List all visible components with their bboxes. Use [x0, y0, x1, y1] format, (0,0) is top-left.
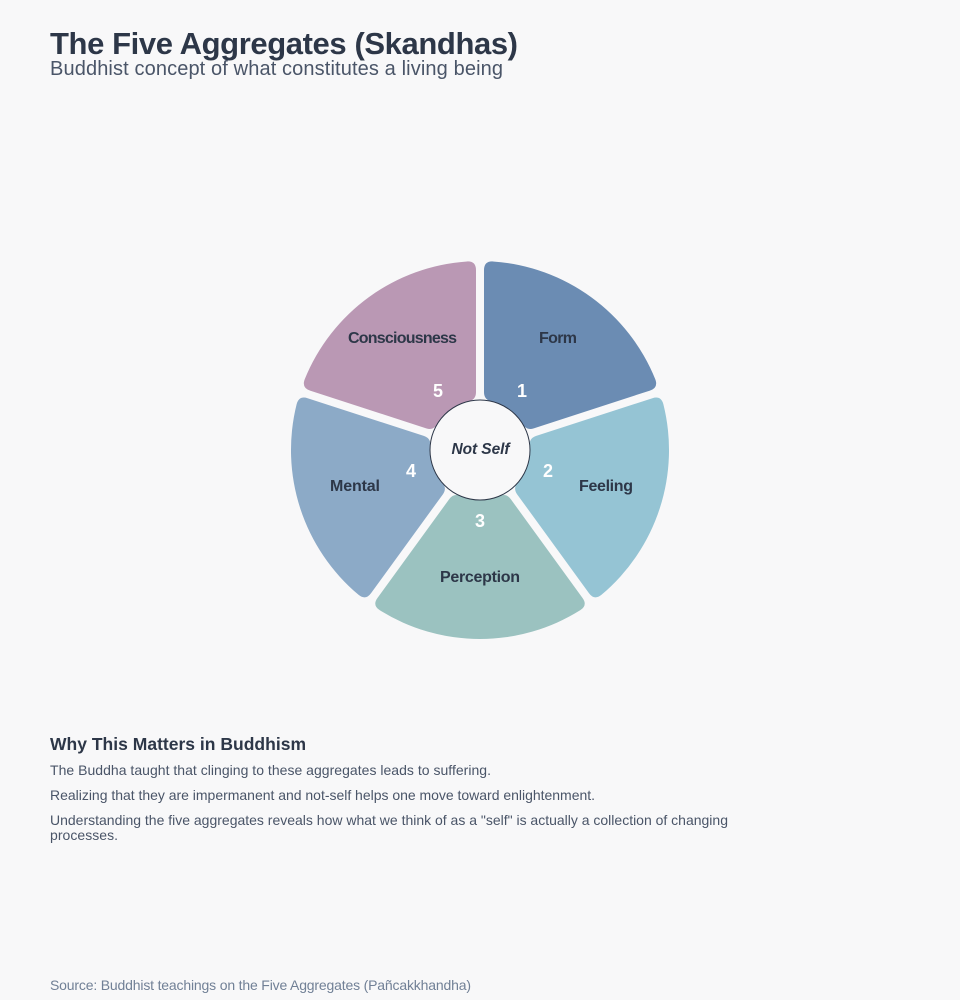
center label: Not Self: Not Self	[452, 441, 511, 458]
number 4: 4	[406, 461, 416, 481]
number 1: 1	[517, 381, 527, 401]
subtitle: Buddhist concept of what constitutes a living being	[50, 58, 503, 80]
source note: Source: Buddhist teachings on the Five Aggregates (Pañcakkhandha)	[50, 977, 471, 993]
paragraph 3	[50, 812, 728, 843]
paragraph 3: Understanding the five aggregates reveals how what we think of as a "self" is actually a collection of changing	[50, 812, 728, 828]
paragraph 1: The Buddha taught that clinging to these aggregates leads to suffering.	[50, 762, 491, 778]
section: why this matters	[50, 734, 728, 843]
number 5: 5	[433, 381, 443, 401]
label: Mental: Mental	[330, 478, 380, 495]
wheel diagram: five aggregates	[268, 236, 692, 639]
number 2: 2	[543, 461, 553, 481]
paragraph 3: processes.	[50, 827, 118, 843]
label: Form: Form	[539, 330, 577, 347]
title: The Five Aggregates (Skandhas)	[50, 26, 518, 61]
label: Consciousness: Consciousness	[348, 330, 457, 347]
segment: Perception	[375, 495, 585, 639]
segment: Form	[422, 236, 676, 475]
label: Feeling: Feeling	[579, 478, 633, 495]
segment: Consciousness	[284, 236, 538, 475]
center circle	[430, 400, 530, 500]
segment: Mental	[268, 364, 470, 608]
label: Perception: Perception	[440, 569, 520, 586]
number 3: 3	[475, 511, 485, 531]
paragraph 2: Realizing that they are impermanent and not-self helps one move toward enlightenment.	[50, 787, 595, 803]
segment: Feeling	[490, 364, 692, 608]
section heading: Why This Matters in Buddhism	[50, 734, 306, 754]
